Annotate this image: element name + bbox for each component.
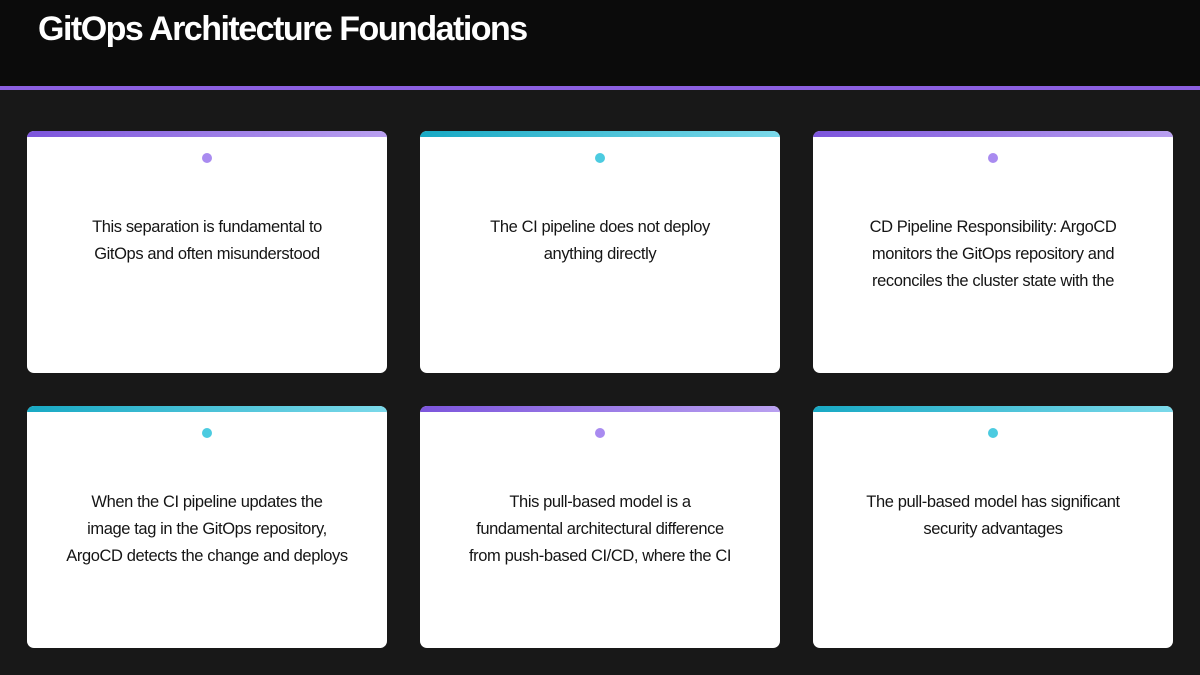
text: When the CI pipeline updates the	[91, 493, 323, 511]
text	[866, 493, 1120, 538]
text	[469, 493, 731, 565]
text: anything directly	[544, 245, 656, 263]
dot	[988, 153, 998, 163]
header bar	[0, 0, 1200, 86]
text: GitOps and often misunderstood	[94, 245, 320, 263]
text: This pull-based model is a	[509, 493, 691, 511]
text	[92, 218, 322, 263]
text: This separation is fundamental to	[92, 218, 322, 236]
dot	[202, 428, 212, 438]
text: security advantages	[923, 520, 1063, 538]
card 3	[813, 131, 1173, 373]
card 2	[420, 131, 780, 373]
text: CD Pipeline Responsibility: ArgoCD	[870, 218, 1116, 236]
dot	[595, 428, 605, 438]
dot	[988, 428, 998, 438]
card 4	[27, 406, 387, 648]
text	[490, 218, 710, 263]
text: The CI pipeline does not deploy	[490, 218, 710, 236]
dot	[202, 153, 212, 163]
text	[66, 493, 348, 565]
text: monitors the GitOps repository and	[872, 245, 1114, 263]
card 1	[27, 131, 387, 373]
text: from push-based CI/CD, where the CI	[469, 547, 731, 565]
text: fundamental architectural difference	[476, 520, 724, 538]
text: The pull-based model has significant	[866, 493, 1120, 511]
card 5	[420, 406, 780, 648]
text: reconciles the cluster state with the	[872, 272, 1114, 290]
text: image tag in the GitOps repository,	[87, 520, 327, 538]
text	[870, 218, 1116, 290]
text: ArgoCD detects the change and deploys	[66, 547, 348, 565]
card 6	[813, 406, 1173, 648]
title: GitOps Architecture Foundations	[38, 10, 527, 48]
dot	[595, 153, 605, 163]
